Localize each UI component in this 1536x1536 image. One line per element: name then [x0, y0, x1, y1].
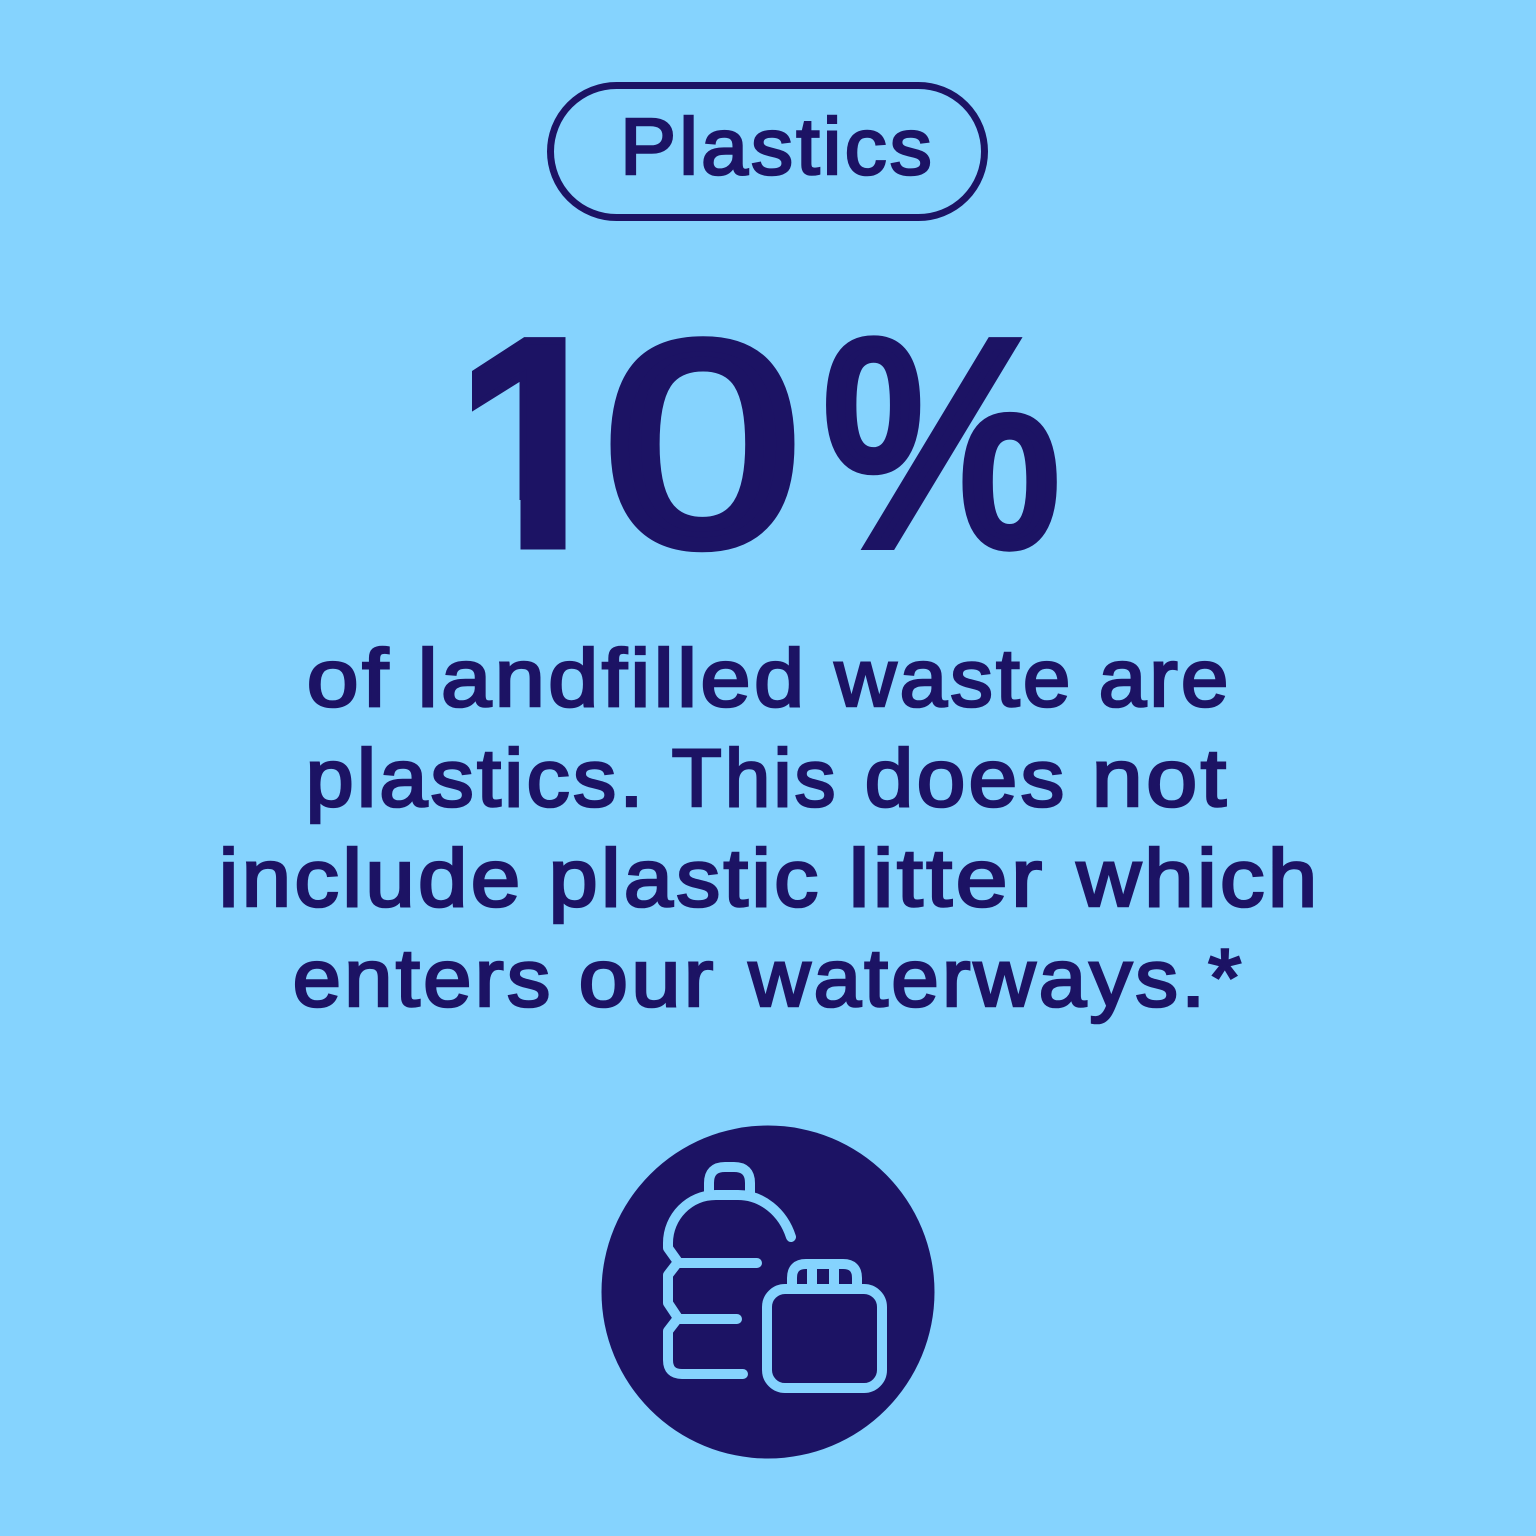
badge: Plastics: Plastics [620, 102, 935, 191]
line 4: enters [293, 933, 554, 1024]
headline statistic: 10% [472, 335, 1057, 552]
line 1: are [1099, 633, 1232, 724]
line 2: does [865, 733, 1068, 824]
icon: plastic bottles in circle [602, 1126, 934, 1458]
line 4 [293, 933, 1245, 1024]
line 3: plastic [549, 833, 822, 924]
badge: Plastics [550, 86, 984, 218]
headline statistic: 10%: 0 [606, 286, 799, 603]
line 1: of [307, 633, 392, 724]
line 1 [307, 633, 1232, 724]
line 3: which [1076, 833, 1321, 924]
headline statistic: 10%: 1 [453, 275, 620, 611]
line 1: waste [834, 633, 1074, 724]
line 3 [219, 833, 1321, 924]
line 4: our [579, 933, 717, 1024]
icon: large bottle [668, 1167, 791, 1374]
line 2: This [672, 733, 839, 824]
text block: description [219, 633, 1321, 1024]
icon: small jar [767, 1264, 882, 1388]
line 2 [306, 733, 1230, 824]
line 4: waterways.* [748, 933, 1245, 1024]
line 2: not [1092, 733, 1230, 824]
line 3: litter [849, 833, 1046, 924]
line 1: landfilled [418, 633, 808, 724]
headline statistic: 10%: % [822, 281, 1061, 606]
line 2: plastics. [306, 733, 647, 824]
line 3: include [219, 833, 524, 924]
